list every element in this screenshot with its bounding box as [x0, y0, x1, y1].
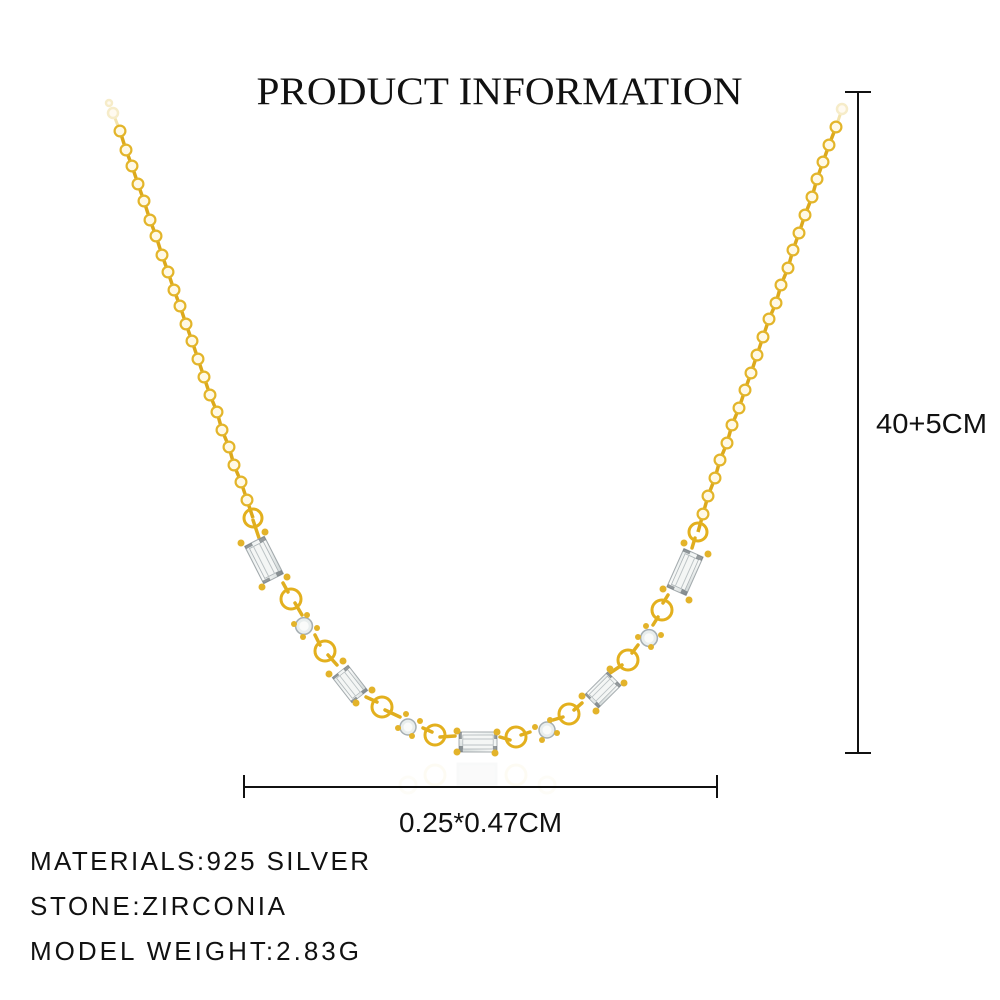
height dimension line	[845, 92, 871, 753]
specification: model weight: MODEL WEIGHT:2.83G	[30, 936, 359, 966]
baguette stones	[245, 536, 703, 752]
round stones	[296, 618, 657, 738]
width label: 0.25*0.47CM	[399, 807, 562, 838]
prongs	[238, 528, 712, 756]
height label: 40+5CM	[876, 408, 987, 439]
reflection under the centre stone	[400, 764, 555, 793]
specification: materials: MATERIALS:925 SILVER	[30, 846, 369, 876]
left chain	[106, 100, 253, 518]
necklace	[106, 100, 847, 793]
specification: stone: STONE:ZIRCONIA	[30, 891, 286, 921]
width dimension line	[244, 775, 717, 798]
right chain	[698, 104, 847, 532]
connector bars	[253, 520, 695, 740]
jump rings	[244, 509, 707, 747]
title: PRODUCT INFORMATION	[256, 70, 742, 113]
